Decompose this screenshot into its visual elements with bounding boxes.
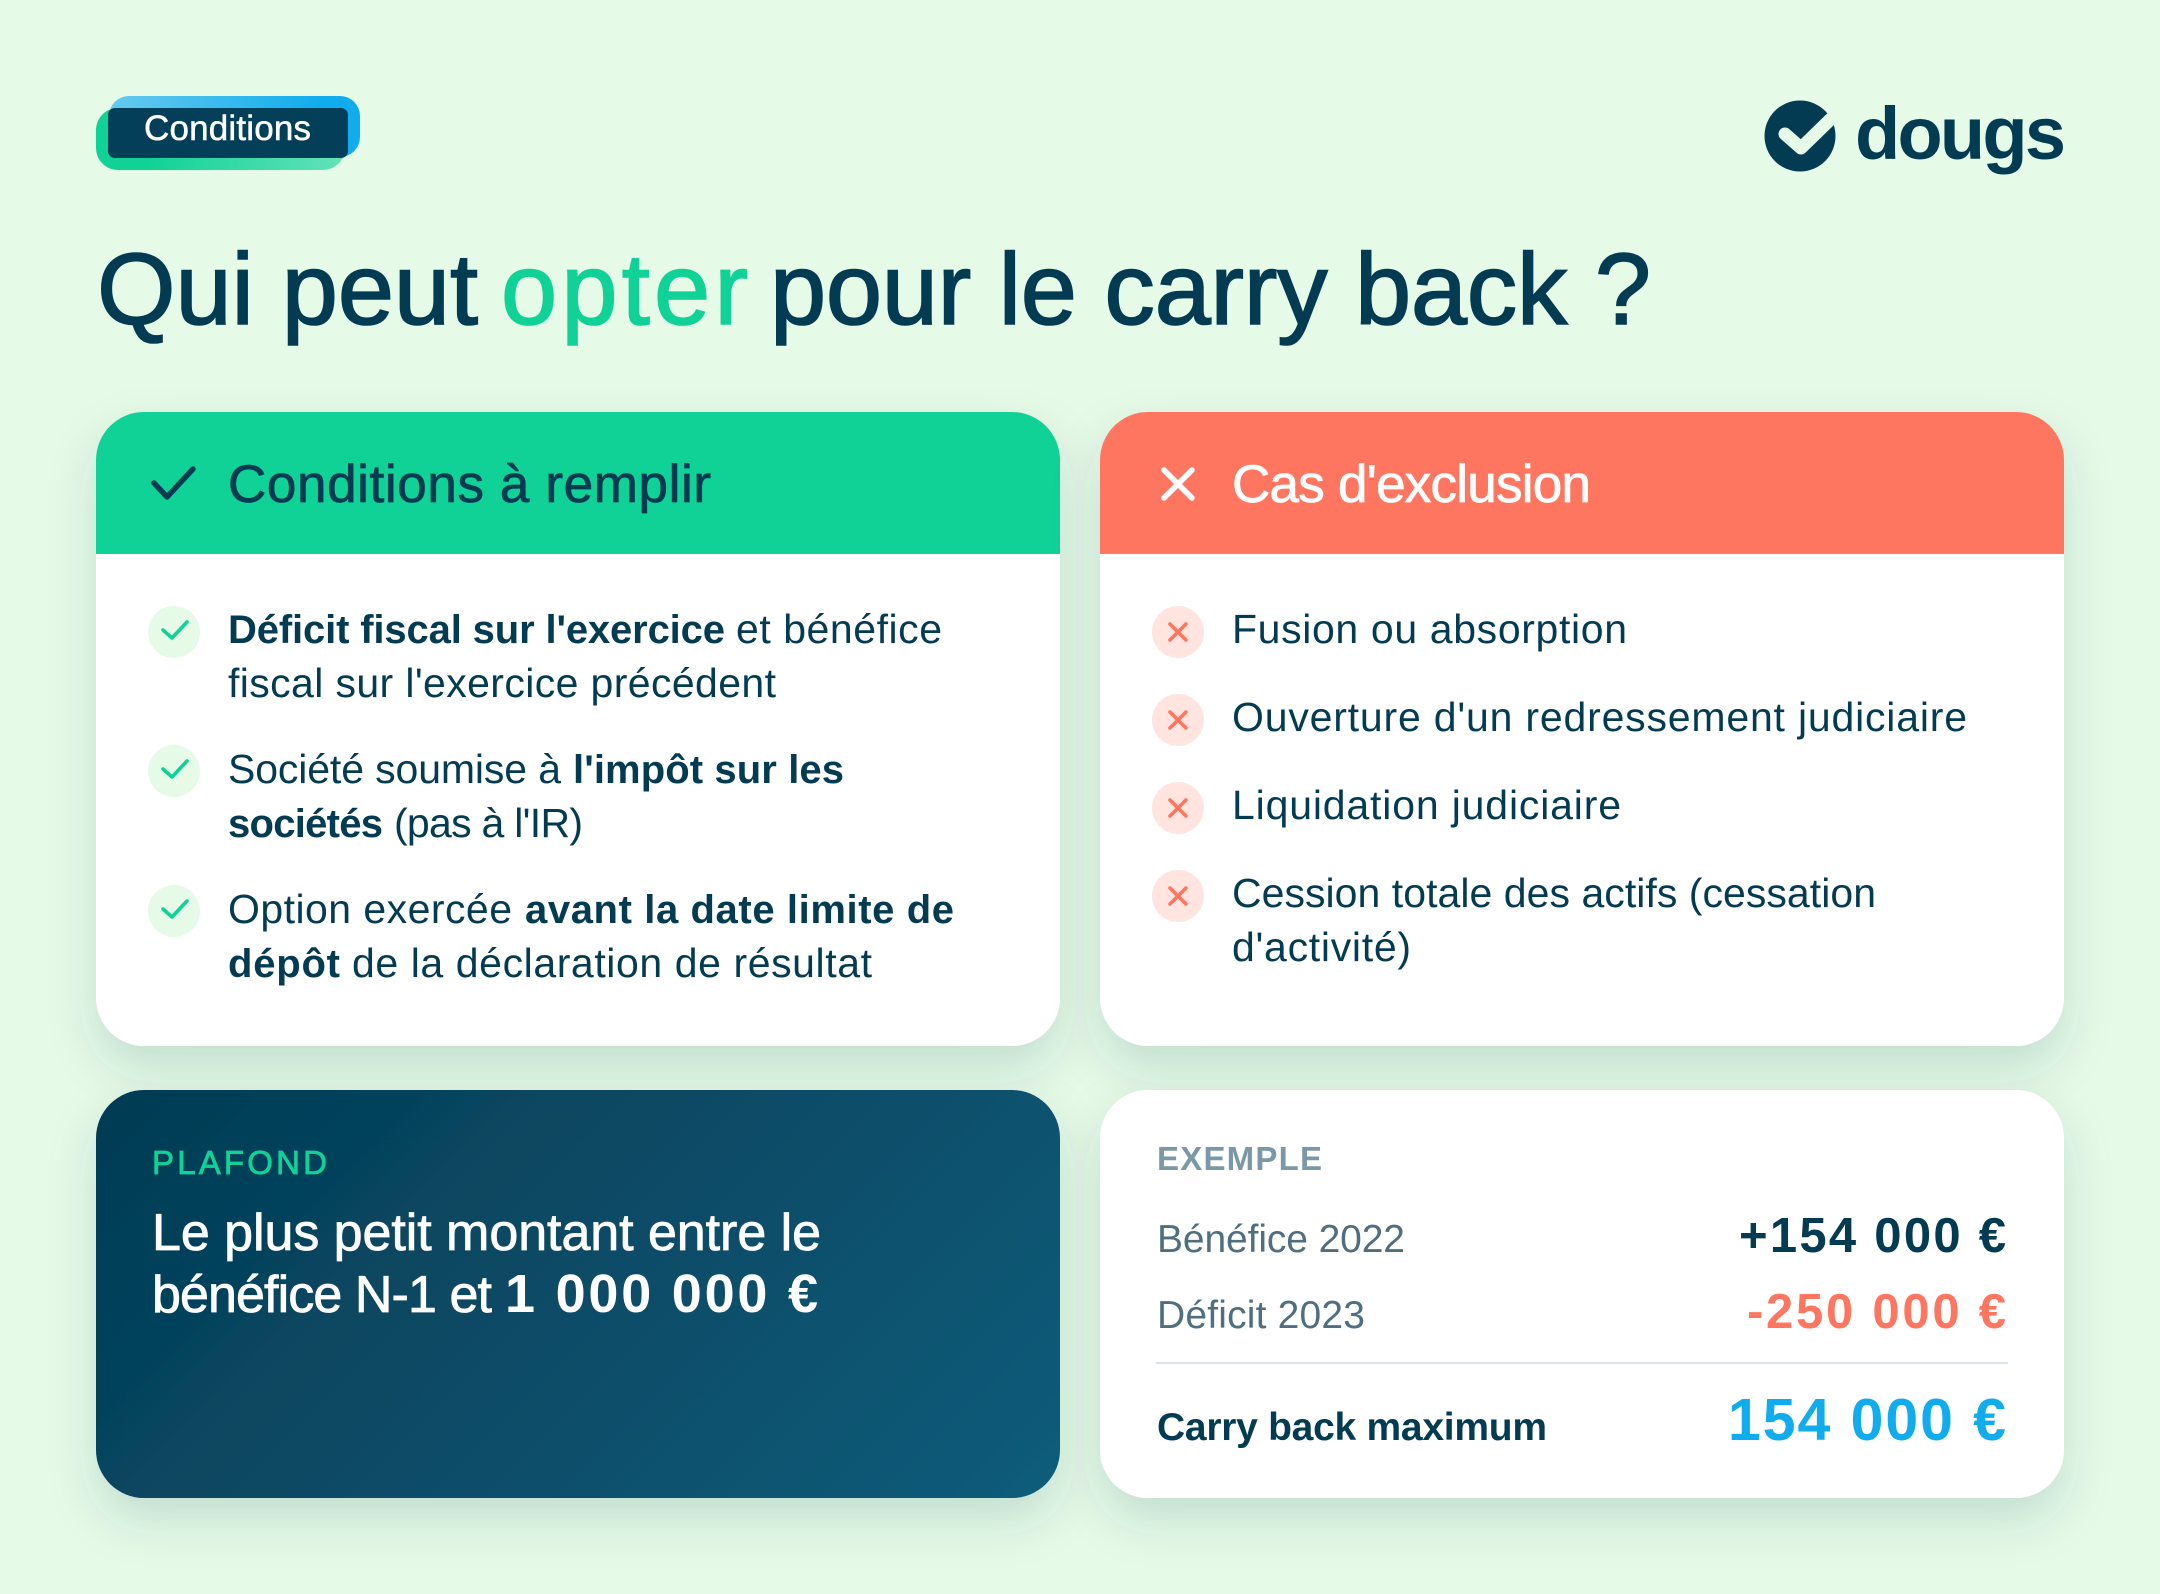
row: déficit 2023 <box>1157 1285 2006 1339</box>
condition item 3 <box>148 885 954 986</box>
row: bénéfice 2022: Bénéfice 2022 <box>1157 1218 1405 1261</box>
condition item 1: et bénéfice <box>736 606 942 652</box>
row: carry back maximum: Carry back maximum <box>1157 1406 1547 1449</box>
icon: header cross <box>1164 470 1192 498</box>
title: Qui peut <box>97 234 478 346</box>
plafond statement: Le plus petit montant entre le <box>152 1204 821 1262</box>
row: bénéfice 2022 <box>1157 1209 2006 1263</box>
condition item 3: dépôt <box>228 942 340 986</box>
title: opter <box>501 234 748 346</box>
condition item 2: (pas à l'IR) <box>394 800 583 846</box>
condition item 1 <box>148 606 942 706</box>
condition item 1: fiscal sur l'exercice précédent <box>228 660 777 706</box>
exclusion item 1: Fusion ou absorption <box>1232 606 1627 652</box>
condition item 3: Option exercée <box>228 886 512 932</box>
panel: conditions à remplir <box>96 412 1060 1046</box>
condition item 2 <box>148 745 844 846</box>
row: bénéfice 2022: +154 000 € <box>1739 1209 2006 1263</box>
exclusion item 4: Cession totale des actifs (cessation <box>1232 870 1876 916</box>
panel: exemple <box>1100 1090 2064 1498</box>
condition item 2: l'impôt sur les <box>573 748 844 792</box>
exclusion item 4: d'activité) <box>1232 924 1411 970</box>
icon: header check <box>154 469 193 497</box>
badge: Conditions: Conditions <box>144 109 311 148</box>
logo: dougs <box>1764 92 2066 175</box>
condition item 3: de la déclaration de résultat <box>352 940 873 986</box>
panel: plafond <box>96 1090 1060 1498</box>
row: carry back maximum <box>1157 1387 2006 1453</box>
exclusion item 4 <box>1152 870 1876 970</box>
row: carry back maximum: 154 000 € <box>1728 1387 2006 1453</box>
exclusion item 3: Liquidation judiciaire <box>1232 782 1621 828</box>
title: pour le carry back ? <box>770 234 1651 346</box>
condition item 2: Société soumise à <box>228 746 561 792</box>
panel header: exclusion <box>1100 412 2064 554</box>
plafond statement: bénéfice N-1 et <box>152 1266 493 1324</box>
panel header: conditions <box>96 412 1060 554</box>
label: plafond: PLAFOND <box>152 1144 327 1181</box>
plafond statement: 1 000 000 € <box>505 1264 818 1324</box>
row: déficit 2023: Déficit 2023 <box>1157 1294 1365 1337</box>
heading: conditions à remplir: Conditions à remplir <box>228 455 711 514</box>
logo: dougs: dougs <box>1855 92 2066 175</box>
condition item 2: sociétés <box>228 802 383 846</box>
badge: Conditions <box>96 96 360 170</box>
condition item 1: Déficit fiscal sur l'exercice <box>228 608 725 652</box>
heading: cas d'exclusion: Cas d'exclusion <box>1232 455 1591 514</box>
row: déficit 2023: -250 000 € <box>1747 1285 2006 1339</box>
panel: cas d'exclusion <box>1100 412 2064 1046</box>
exclusion item 2: Ouverture d'un redressement judiciaire <box>1232 694 1967 740</box>
title <box>97 234 1651 346</box>
condition item 3: avant la date limite de <box>525 888 954 932</box>
label: exemple: EXEMPLE <box>1157 1140 1322 1177</box>
plafond statement <box>152 1204 821 1324</box>
